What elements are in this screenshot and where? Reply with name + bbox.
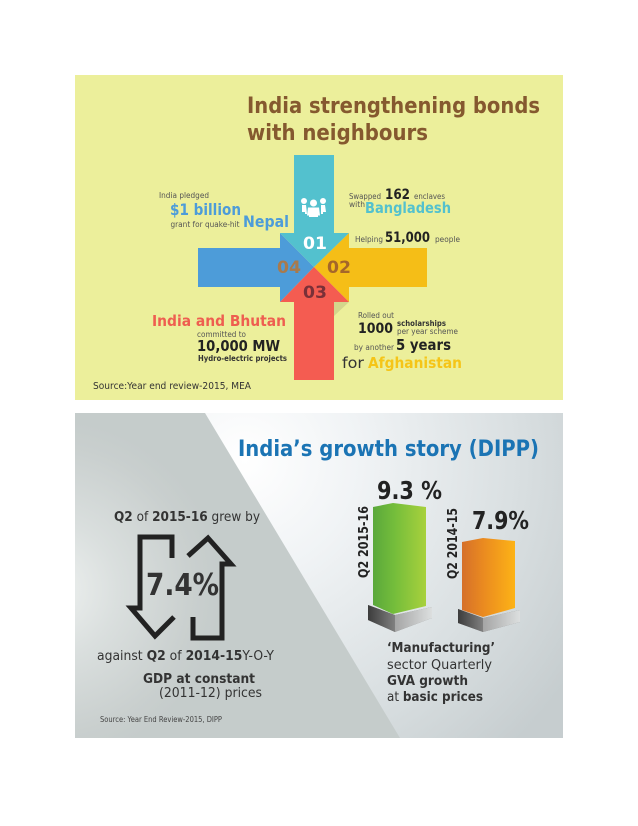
text block: Afghanistan: by another bbox=[354, 343, 395, 352]
arrow 03: red bbox=[280, 267, 349, 380]
text block: Afghanistan bbox=[342, 311, 462, 372]
text block: Afghanistan: Rolled out bbox=[358, 311, 394, 320]
source note: Source: Year End Review-2015, DIPP bbox=[100, 715, 222, 724]
source note: Source:Year end review-2015, MEA bbox=[93, 381, 251, 392]
number 03: 03 bbox=[303, 283, 327, 303]
bar: Q2 2014-15 bbox=[445, 506, 529, 632]
number 02: 02 bbox=[327, 258, 351, 278]
arrow 04: blue bbox=[198, 233, 314, 302]
bar: Q2 2015-16 bbox=[356, 476, 442, 632]
text: Q2 grew by: Q2 of 2015-16 grew by bbox=[114, 509, 260, 525]
panel: India strengthening bonds with neighbours bbox=[75, 75, 563, 400]
light diagonal background bbox=[205, 413, 563, 738]
text block: Bangladesh: 162 bbox=[385, 187, 410, 203]
text block: Nepal: India pledged bbox=[159, 191, 209, 200]
text block: Afghanistan: 1000 bbox=[358, 321, 393, 337]
icon: people group bbox=[301, 198, 326, 217]
text block: helping people: Helping bbox=[355, 235, 383, 244]
text block: Afghanistan: scholarships bbox=[397, 319, 446, 328]
number 04: 04 bbox=[277, 258, 301, 278]
text block: Nepal: Nepal bbox=[243, 212, 289, 231]
number 01: 01 bbox=[303, 234, 327, 254]
text: prices: (2011-12) prices bbox=[159, 685, 262, 701]
text block: Bhutan: committed to bbox=[197, 330, 246, 339]
text: Manufacturing caption bbox=[387, 640, 495, 705]
text block: Afghanistan: Afghanistan bbox=[368, 354, 462, 372]
text block: Bhutan: India and Bhutan bbox=[152, 312, 286, 330]
cross arrow diagram bbox=[198, 155, 427, 380]
title: bonds with neighbours bbox=[247, 94, 540, 146]
text: Manufacturing caption: at basic prices bbox=[387, 689, 483, 705]
text block: Afghanistan: per year scheme bbox=[397, 327, 458, 336]
arrow 01: teal bbox=[280, 155, 349, 267]
text block: Afghanistan: for bbox=[342, 354, 365, 372]
text block: Bhutan: Hydro-electric projects bbox=[198, 354, 287, 363]
value 7.4%: 7.4% bbox=[146, 568, 219, 603]
icon: down and up arrows bbox=[131, 537, 231, 638]
bar: Q2 2014-15: 7.9% bbox=[472, 506, 529, 535]
text block: Bangladesh bbox=[349, 187, 451, 217]
text block: Bangladesh: with bbox=[349, 200, 365, 209]
text: Manufacturing caption: GVA growth bbox=[387, 673, 468, 689]
text block: Bangladesh: enclaves bbox=[414, 192, 445, 201]
text block: Afghanistan: 5 years bbox=[396, 336, 451, 354]
text: Manufacturing caption: ‘Manufacturing’ bbox=[387, 640, 495, 656]
text block: helping people bbox=[355, 230, 460, 246]
text block: helping people: people bbox=[435, 235, 460, 244]
text block: Bangladesh: Bangladesh bbox=[365, 199, 451, 217]
text block: Nepal bbox=[159, 191, 289, 231]
text: Manufacturing caption: sector Quarterly bbox=[387, 657, 492, 673]
bar: Q2 2014-15: Q2 2014-15 bbox=[445, 508, 461, 579]
bar: Q2 2015-16: Q2 2015-16 bbox=[356, 506, 372, 578]
text block: helping people: 51,000 bbox=[385, 230, 430, 246]
arrow 02: yellow bbox=[314, 233, 427, 302]
text block: Bangladesh: Swapped bbox=[349, 192, 381, 201]
title: growth story: India’s growth story (DIPP) bbox=[238, 437, 539, 462]
text: GDP at constant: GDP at constant bbox=[143, 671, 255, 687]
title: bonds with neighbours: with neighbours bbox=[247, 121, 428, 146]
panel: India's growth story bbox=[75, 413, 563, 738]
text block: Nepal: $1 billion bbox=[170, 200, 241, 219]
text: against Q2: against Q2 of 2014-15Y-O-Y bbox=[97, 648, 275, 664]
arrow shadow bbox=[334, 302, 349, 316]
bar: Q2 2015-16: 9.3 % bbox=[377, 476, 442, 505]
text block: Bhutan: 10,000 MW bbox=[197, 337, 280, 355]
text block: Nepal: grant for quake-hit bbox=[170, 220, 240, 229]
title: bonds with neighbours: India strengthening bonds bbox=[247, 94, 540, 119]
text block: Bhutan bbox=[152, 312, 287, 363]
